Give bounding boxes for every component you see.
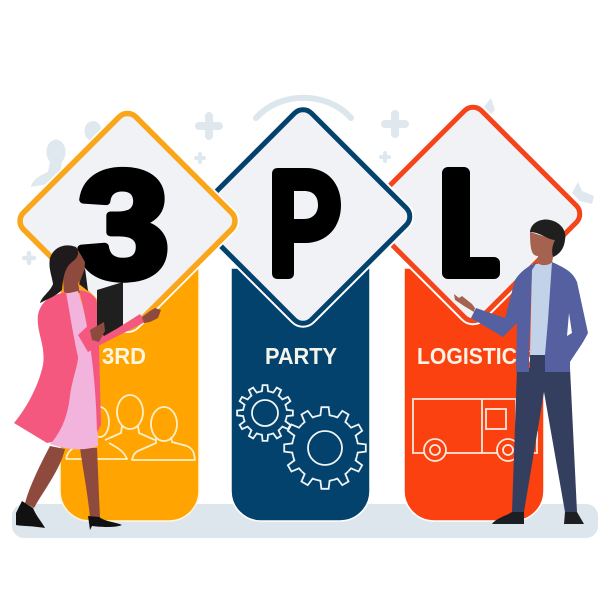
coat	[14, 292, 78, 443]
hair	[530, 220, 565, 257]
hand	[454, 294, 475, 312]
dress	[50, 291, 98, 449]
shirt	[530, 264, 552, 355]
hair	[40, 245, 78, 303]
jacket	[515, 262, 537, 372]
icon: small gear	[237, 385, 293, 441]
panel: navy PARTY column	[231, 268, 370, 521]
diamond: P	[191, 105, 415, 328]
label: LOGISTICS: LOGISTICS	[417, 343, 531, 369]
trousers	[512, 368, 577, 512]
neck and face	[530, 232, 556, 265]
icon: group of people	[66, 395, 195, 460]
panel: orange 3RD column	[60, 268, 199, 521]
front leg and foot	[80, 448, 100, 518]
shoes	[492, 512, 524, 524]
arm and sleeve	[78, 314, 145, 352]
extended arm	[471, 280, 518, 337]
label: 3RD: 3RD	[102, 343, 146, 369]
neck and face	[62, 250, 85, 293]
label: PARTY: PARTY	[265, 343, 337, 369]
hands	[142, 308, 161, 323]
ground platform	[12, 504, 598, 538]
background decoration: arc, plus signs and silhouettes	[24, 98, 594, 263]
icon: large gear	[284, 407, 366, 489]
panel: red LOGISTICS column	[404, 268, 544, 521]
numeral 3: 3	[78, 140, 169, 310]
diamond: L	[361, 102, 585, 326]
back leg and foot	[25, 446, 65, 508]
figure: woman with tablet	[14, 245, 161, 530]
letter L	[448, 173, 494, 273]
icon: delivery truck	[413, 399, 537, 461]
letter P	[272, 168, 341, 279]
figure: man in blue jacket	[454, 220, 588, 524]
tablet	[97, 282, 123, 342]
diamond: 3	[15, 109, 240, 333]
